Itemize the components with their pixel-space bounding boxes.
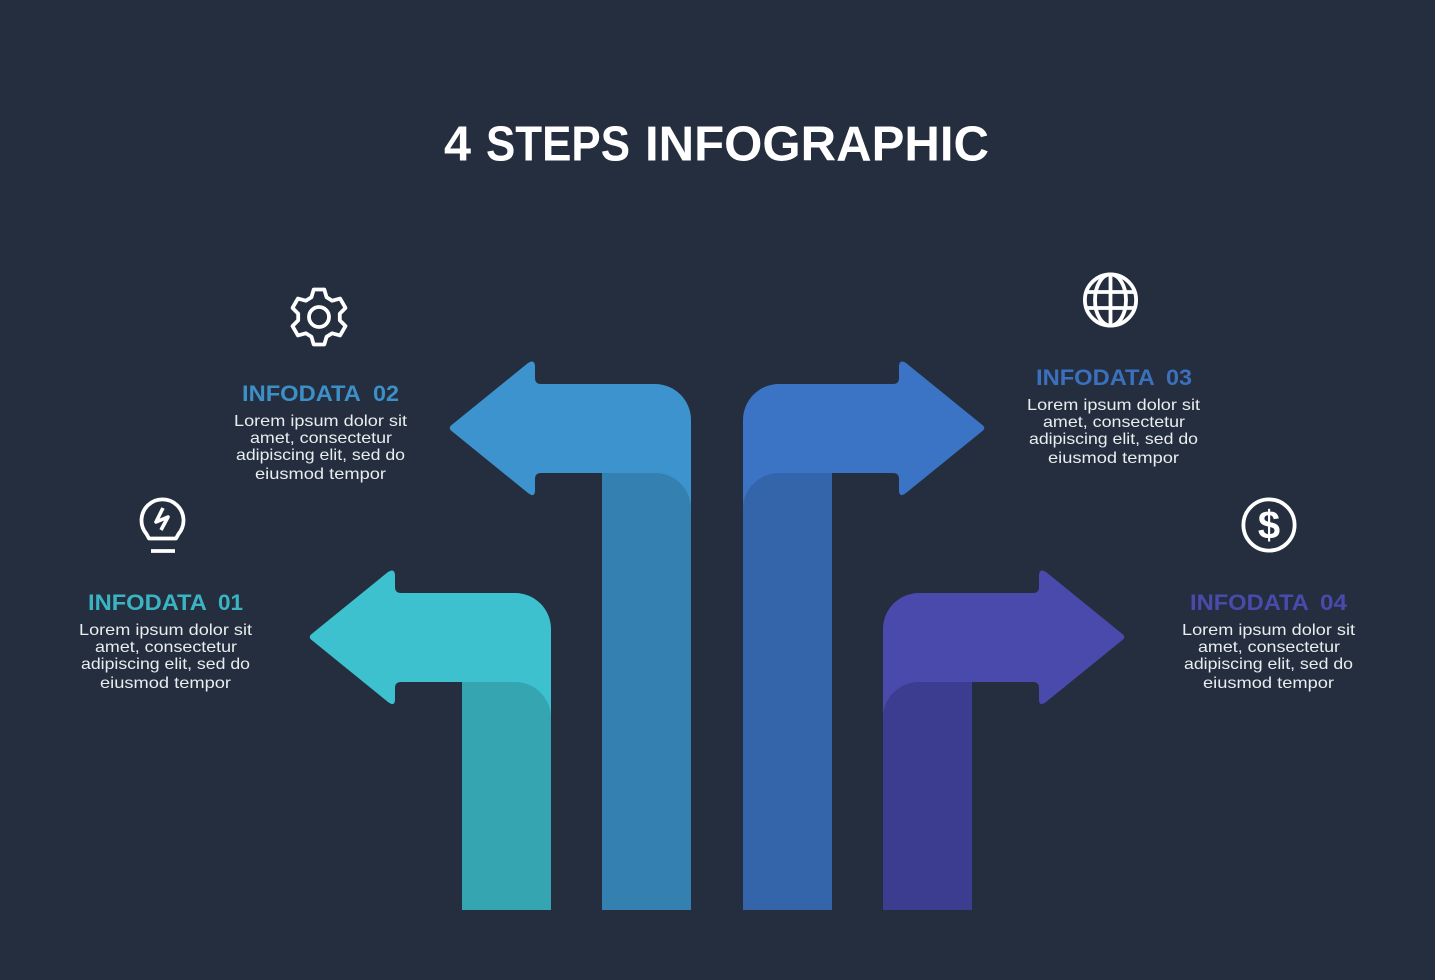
text block: infodata 04: amet, consectetur: [1198, 639, 1341, 656]
arrow 2: blue left: [450, 362, 691, 910]
text block: infodata 02: amet, consectetur: [250, 430, 393, 447]
title: STEPS: [486, 118, 630, 172]
icon: dollar coin: $: [1258, 504, 1280, 548]
arrow 1: teal left: [310, 571, 551, 910]
text block: infodata 02: adipiscing elit, sed do: [236, 447, 405, 464]
text block: infodata 03: Lorem ipsum dolor sit: [1027, 397, 1201, 414]
text block: infodata 04: eiusmod tempor: [1203, 675, 1335, 692]
text block: infodata 03: adipiscing elit, sed do: [1029, 431, 1198, 448]
text block: infodata 01: 01: [218, 590, 243, 615]
title: 4: [444, 118, 471, 172]
text block: infodata 02: Lorem ipsum dolor sit: [234, 413, 408, 430]
text block: infodata 02: 02: [373, 381, 399, 406]
text block: infodata 01: adipiscing elit, sed do: [81, 656, 250, 673]
text block: infodata 01: [79, 590, 253, 692]
title: INFOGRAPHIC: [645, 118, 989, 172]
text block: infodata 02: INFODATA: [242, 381, 361, 406]
text block: infodata 02: eiusmod tempor: [255, 466, 387, 483]
text block: infodata 03: eiusmod tempor: [1048, 450, 1180, 467]
text block: infodata 03: INFODATA: [1036, 365, 1155, 390]
text block: infodata 01: eiusmod tempor: [100, 675, 232, 692]
text block: infodata 01: amet, consectetur: [95, 639, 238, 656]
text block: infodata 04: 04: [1320, 590, 1348, 615]
text block: infodata 01: Lorem ipsum dolor sit: [79, 622, 253, 639]
text block: infodata 04: adipiscing elit, sed do: [1184, 656, 1353, 673]
text block: infodata 03: amet, consectetur: [1043, 414, 1186, 431]
icon: gear: [292, 290, 346, 344]
icon: globe: [1085, 274, 1136, 326]
text block: infodata 04: [1182, 590, 1356, 692]
arrow 4: indigo right: [883, 571, 1124, 910]
text block: infodata 03: [1027, 365, 1201, 467]
text block: infodata 01: INFODATA: [88, 590, 207, 615]
text block: infodata 04: Lorem ipsum dolor sit: [1182, 622, 1356, 639]
text block: infodata 02: [234, 381, 408, 483]
icon: dollar coin: [1243, 499, 1295, 551]
icon: light bulb: [142, 499, 184, 551]
arrow 3: royal blue right: [743, 362, 984, 910]
text block: infodata 04: INFODATA: [1190, 590, 1309, 615]
text block: infodata 03: 03: [1166, 365, 1192, 390]
